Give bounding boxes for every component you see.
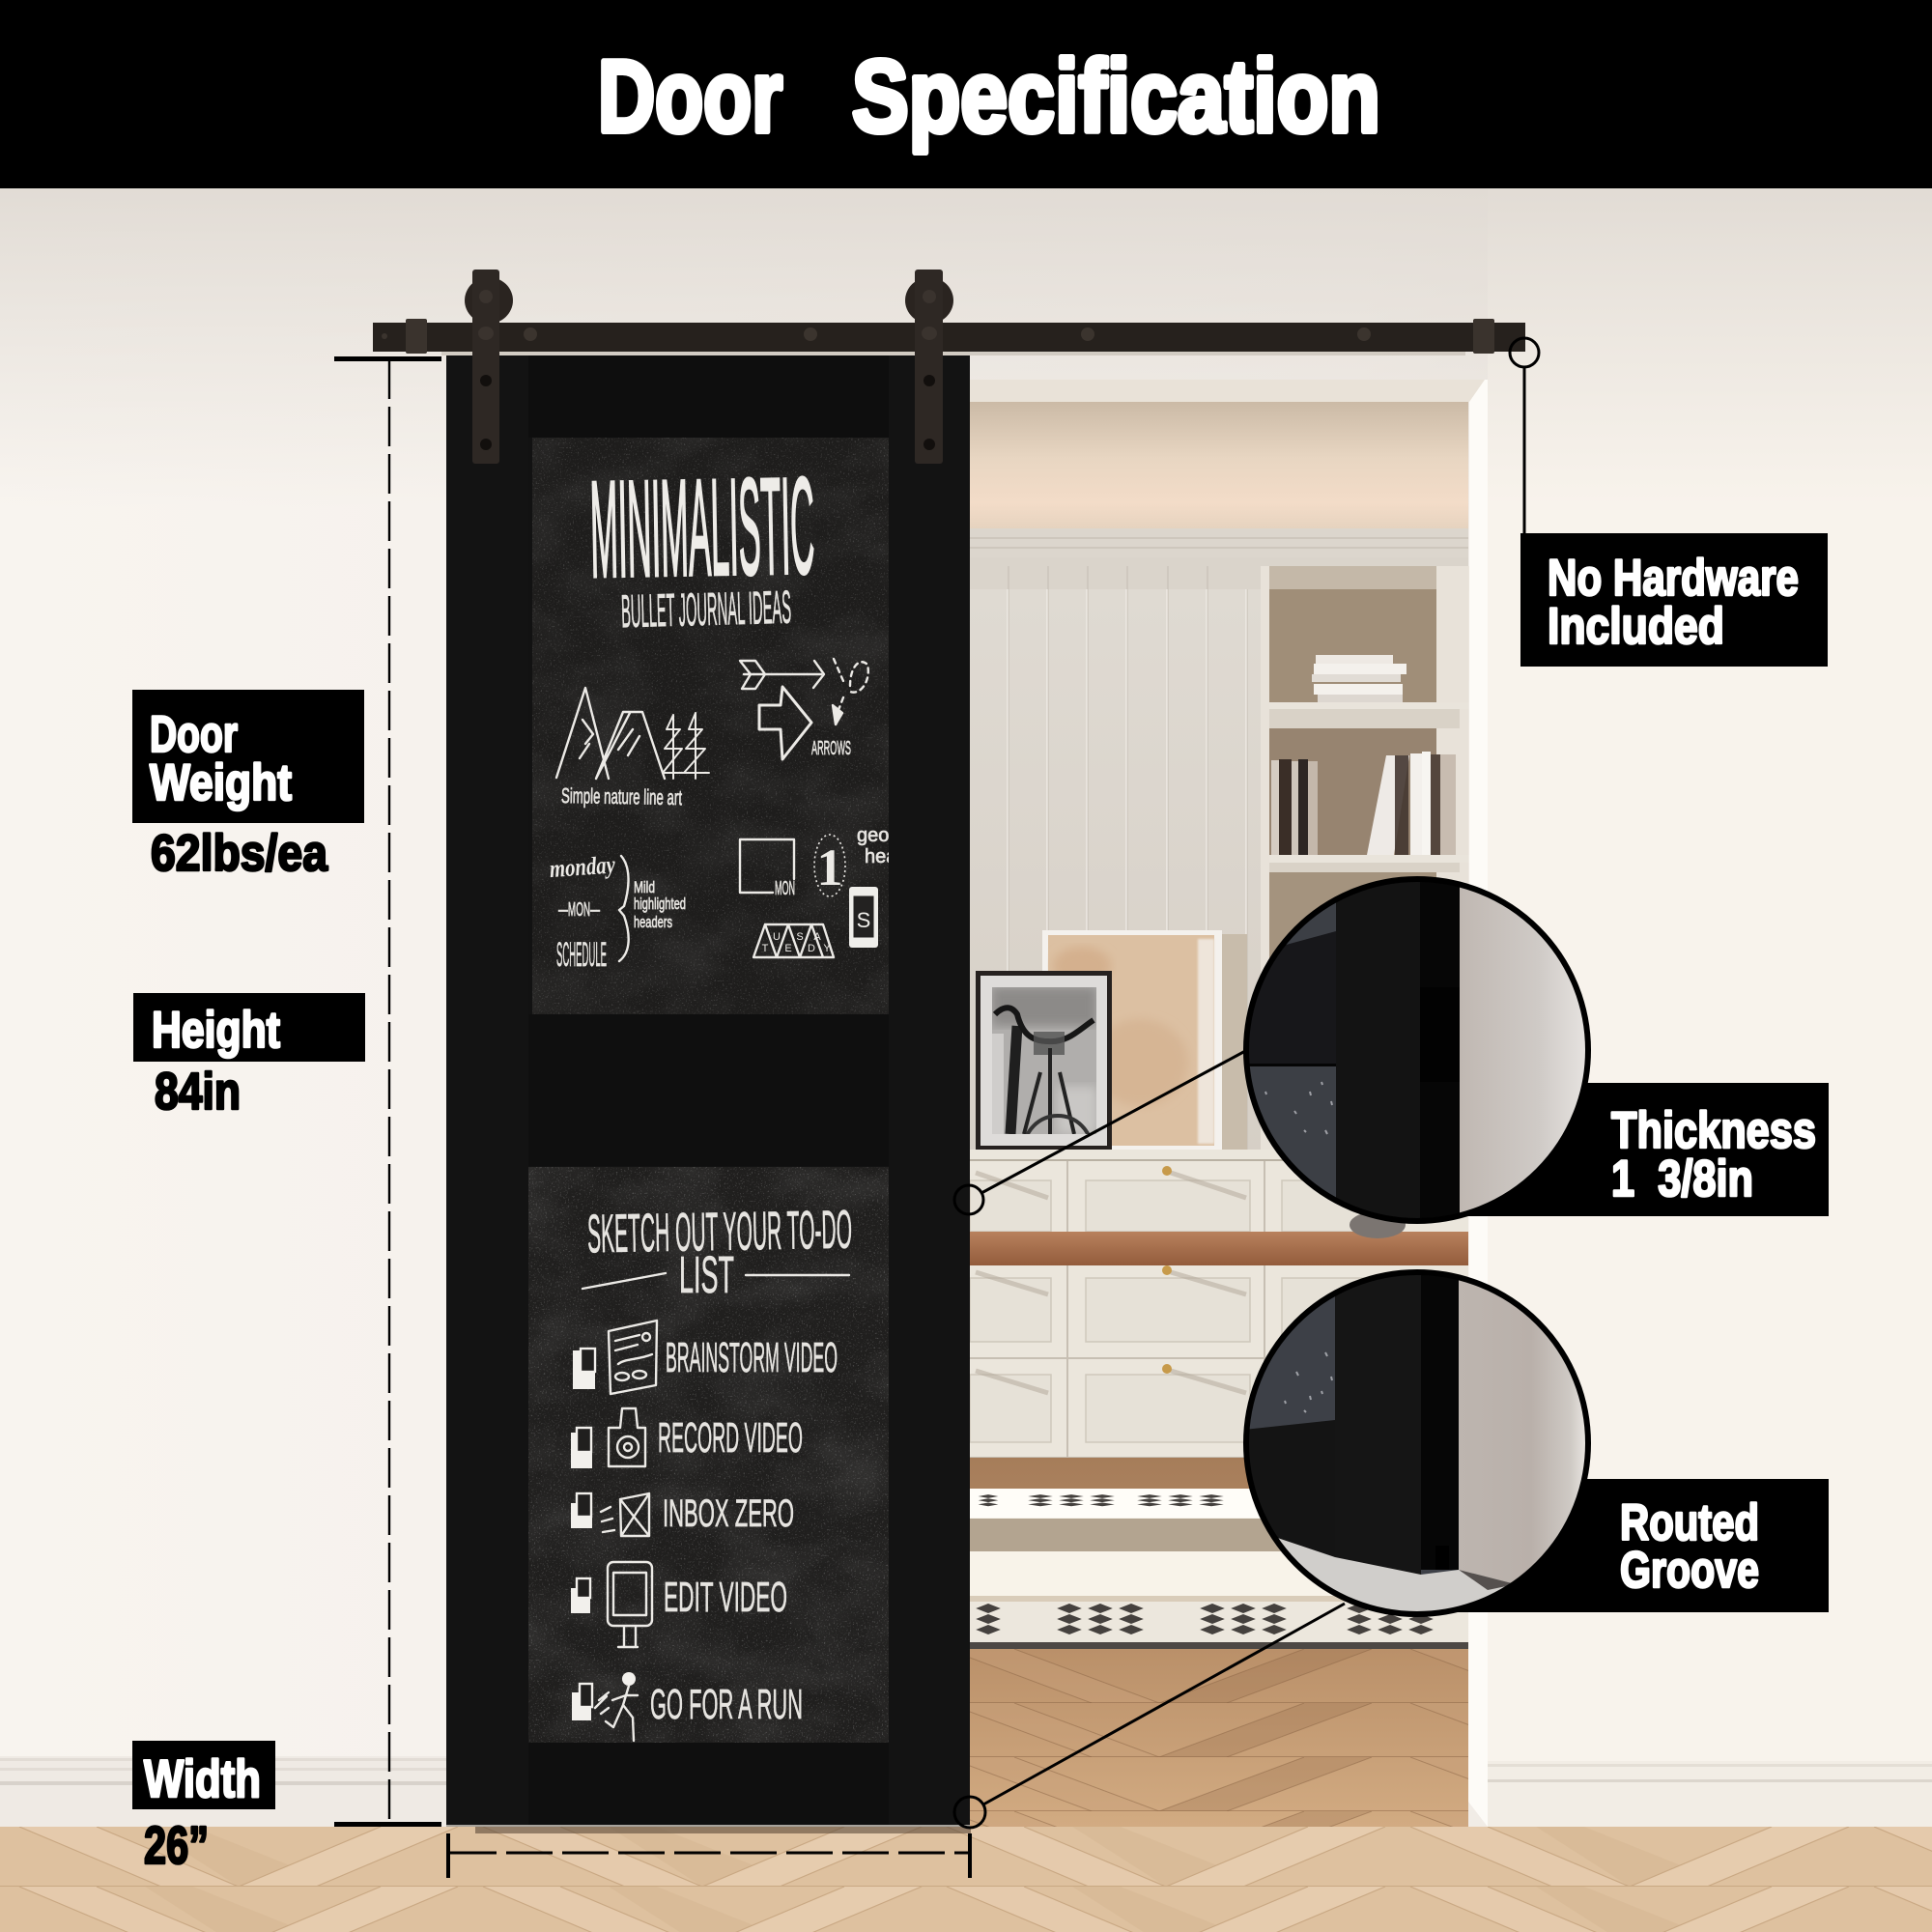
label: no hardware included: No Hardware [1548, 550, 1799, 607]
lower chalkboard panel: BRAINSTORM VIDEO [666, 1334, 838, 1381]
chalk S badge [849, 887, 878, 948]
patterned rug [970, 1489, 1468, 1649]
label: door weight: Door [150, 706, 238, 763]
chalk geometric caption [858, 831, 889, 864]
books [1271, 655, 1456, 855]
barn door [446, 355, 970, 1827]
upper chalkboard panel [532, 438, 889, 1014]
lower chalkboard panel: GO FOR A RUN [650, 1681, 803, 1728]
label: width [132, 1741, 275, 1875]
chalk highlighted headers: headers [634, 913, 672, 931]
label: no hardware included: Included [1548, 598, 1724, 655]
to-do item: inbox zero [571, 1492, 794, 1536]
to-do item: edit video [571, 1562, 787, 1647]
detail circle: routed groove [1243, 1269, 1591, 1617]
label: height: Height [152, 1002, 280, 1059]
chalk pennant word: E [784, 943, 792, 954]
lower chalkboard panel [528, 1167, 889, 1743]
chalk pennant word [753, 924, 834, 957]
upper chalkboard panel: BULLET JOURNAL IDEAS [620, 582, 792, 638]
chalk geometric caption: headers [865, 846, 934, 867]
to-do item: brainstorm video [573, 1321, 838, 1394]
leader line: thickness [954, 1050, 1247, 1214]
soffit and cove lighting [970, 380, 1485, 589]
room floor [970, 1458, 1468, 1827]
chalk box heading [740, 839, 795, 899]
width dimension line [446, 1833, 972, 1878]
door jamb [1468, 380, 1488, 1827]
room seen through the doorway [970, 380, 1488, 1827]
text: MINIMALISTIC [589, 449, 815, 607]
label: door weight: Weight [150, 754, 292, 811]
floor [0, 1827, 1932, 1932]
label: routed groove text: Routed [1620, 1494, 1759, 1551]
title [598, 40, 1380, 154]
leader line: routed groove [954, 1604, 1345, 1828]
chalk highlighted headers [634, 881, 686, 927]
chalk highlighted headers: Mild [634, 878, 655, 896]
label: door weight [132, 690, 364, 882]
chalk geometric caption: geometric [857, 825, 942, 846]
chalk arrows [740, 659, 868, 759]
title: Door [598, 40, 782, 154]
label: no hardware included [1520, 533, 1828, 667]
label: width: Width [144, 1748, 261, 1808]
grey pot on the counter [1350, 1211, 1406, 1238]
upper chalkboard panel: MON [775, 878, 795, 899]
chalk pennant word: Y [823, 943, 831, 954]
door stiles [446, 355, 970, 1826]
chalk pennant word: T [762, 943, 769, 954]
leader line: hardware [1510, 338, 1539, 533]
chalk monday: monday [549, 850, 616, 883]
upper chalkboard panel: SCHEDULE [556, 936, 607, 974]
chalk highlighted headers: highlighted [634, 895, 686, 913]
rail bolts [382, 327, 1371, 341]
label: height [133, 993, 365, 1121]
chalk title line two: LIST [679, 1246, 734, 1304]
leaning art prints [976, 930, 1247, 1150]
chalk nature caption: Simple nature line art [561, 783, 682, 810]
chalk pennant word: D [808, 943, 815, 954]
door rails [528, 355, 889, 1826]
chalk pennant word: U [773, 931, 781, 943]
chalk pennant word: A [813, 931, 821, 943]
to-do item: edit video: EDIT VIDEO [664, 1574, 787, 1621]
rail stops [406, 319, 1494, 354]
detail circle: door thickness [1243, 876, 1591, 1224]
title: Specification [852, 40, 1380, 154]
to-do item: record video [571, 1408, 803, 1468]
chalk pennant word: S [796, 931, 804, 943]
header band [0, 0, 1932, 188]
lower chalkboard panel: RECORD VIDEO [658, 1414, 803, 1462]
label: door weight: 62lbs/ea [151, 825, 327, 882]
label: height: 84in [155, 1063, 241, 1121]
label: routed groove text [1620, 1494, 1759, 1599]
label: routed groove box [1449, 1479, 1829, 1612]
label: thickness text [1611, 1102, 1816, 1208]
label: thickness text: 1 3/8in [1611, 1151, 1753, 1208]
baseboards [0, 1756, 1932, 1827]
height dimension line [334, 356, 441, 1827]
upper chalkboard panel: ARROWS [811, 738, 851, 759]
chalk brace [619, 856, 629, 961]
chalk title line two [582, 1246, 849, 1304]
to-do item: inbox zero: INBOX ZERO [663, 1492, 794, 1535]
barn door: SKETCH OUT YOUR TO-DO [586, 1199, 853, 1264]
wooden counter [970, 1232, 1468, 1265]
label: thickness text: Thickness [1611, 1102, 1816, 1159]
wall panelling [970, 566, 1264, 1159]
roller hanger right [905, 270, 953, 464]
to-do item: go for a run [572, 1672, 803, 1741]
chalk mountains [556, 688, 709, 779]
chalk S badge: S [857, 908, 870, 932]
barn door track rail [373, 319, 1525, 355]
upper chalkboard panel: —MON— [558, 899, 600, 921]
bookshelf [1261, 566, 1469, 1165]
cabinets [970, 1150, 1468, 1463]
label: routed groove text: Groove [1620, 1542, 1759, 1599]
label: thickness box [1449, 1083, 1829, 1216]
chalk numbered circle: 1 [817, 838, 842, 896]
roller hanger left [465, 270, 513, 464]
label: width: 26” [144, 1815, 209, 1875]
